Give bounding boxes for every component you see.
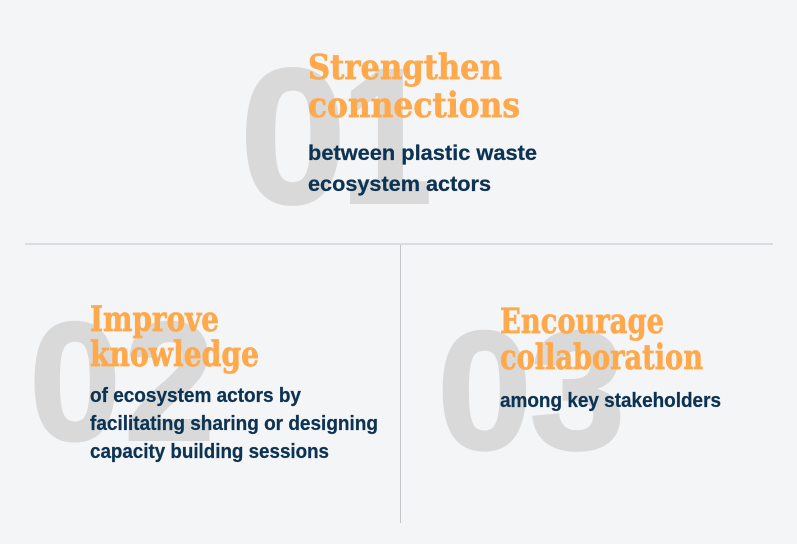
panel: item 03 — [438, 296, 721, 484]
number 02: 2 — [124, 288, 214, 476]
heading: Encourage collaboration: collaboration — [500, 337, 703, 378]
heading: Strengthen connections: Strengthen — [308, 47, 502, 88]
body text: among key stakeholders — [500, 390, 721, 412]
panel: item 01 — [240, 28, 537, 244]
heading: Encourage collaboration: Encourage — [500, 301, 664, 342]
number 03: 3 — [530, 296, 625, 484]
panel: item 02 — [30, 288, 378, 476]
body text: ecosystem actors — [308, 173, 491, 196]
heading: Improve knowledge: knowledge — [90, 334, 259, 375]
number 01: 1 — [341, 28, 432, 244]
heading: Improve knowledge: Improve — [90, 299, 219, 340]
body text: of ecosystem actors by — [90, 385, 302, 407]
heading: Strengthen connections: connections — [308, 85, 520, 126]
number 03: 0 — [438, 296, 532, 484]
body text: capacity building sessions — [90, 441, 329, 463]
body text: facilitating sharing or designing — [90, 413, 378, 435]
number 02: 0 — [30, 288, 120, 476]
number 01: 0 — [240, 28, 346, 244]
body text: between plastic waste — [308, 142, 537, 165]
